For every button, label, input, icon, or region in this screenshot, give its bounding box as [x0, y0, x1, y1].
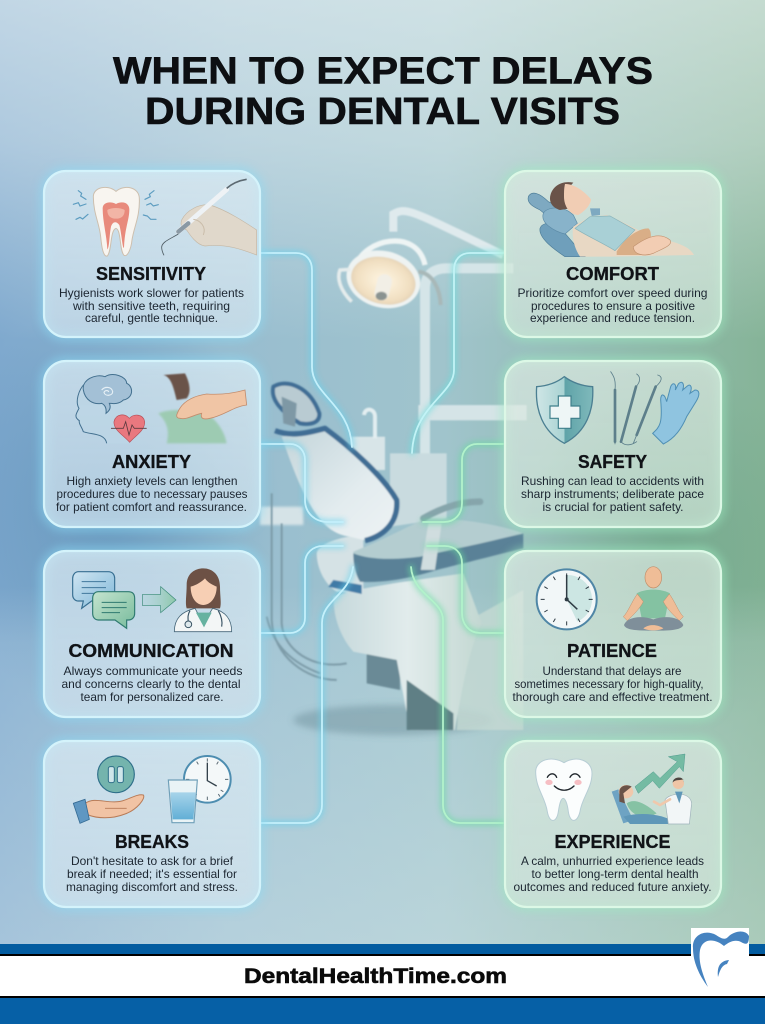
- central scene: dental chair and lamp: [260, 211, 527, 735]
- text: sensitivity: careful, gentle technique.: [85, 311, 218, 325]
- panel: patience: [505, 551, 721, 717]
- text: breaks: Don't hesitate to ask for a brief: [71, 854, 234, 868]
- text: anxiety: High anxiety levels can lengthen: [66, 474, 238, 488]
- text: patience: thorough care and effective treatment.: [512, 690, 712, 704]
- panel: safety: [505, 361, 721, 527]
- footer band: [0, 944, 765, 1024]
- connector lines: [260, 253, 503, 823]
- panel: communication: [44, 551, 260, 717]
- text: comfort: experience and reduce tension.: [530, 311, 695, 325]
- card glows: [44, 171, 721, 907]
- text: patience: Understand that delays are: [542, 664, 682, 678]
- text: safety: Rushing can lead to accidents with: [521, 474, 704, 488]
- text: sensitivity: [59, 286, 244, 325]
- heading: patience: PATIENCE: [567, 641, 657, 661]
- panel: anxiety: [44, 361, 260, 527]
- logo: tooth: [691, 928, 749, 987]
- title: DURING DENTAL VISITS: [145, 91, 620, 133]
- panel: experience: [505, 741, 721, 907]
- text: experience: [514, 854, 712, 894]
- text: breaks: break if needed; it's essential for: [67, 867, 237, 881]
- text: breaks: [66, 854, 238, 894]
- panel: sensitivity: [44, 171, 260, 337]
- icon: speech bubbles, arrow and dentist: [73, 568, 232, 632]
- text: experience: A calm, unhurried experience leads: [521, 854, 704, 868]
- text: communication: [62, 664, 243, 704]
- text: experience: outcomes and reduced future anxiety.: [514, 880, 712, 894]
- text: comfort: procedures to ensure a positive: [531, 299, 695, 313]
- title: WHEN TO EXPECT DELAYS: [113, 50, 653, 92]
- text: communication: Always communicate your needs: [64, 664, 243, 678]
- website address: DentalHealthTime.com: [244, 965, 507, 988]
- heading: experience: EXPERIENCE: [554, 832, 670, 852]
- icon: sensitive tooth: [73, 179, 257, 256]
- text: sensitivity: with sensitive teeth, requiring: [72, 299, 230, 313]
- text: safety: sharp instruments; deliberate pace: [521, 487, 704, 501]
- text: communication: team for personalized care.: [80, 690, 224, 704]
- heading: breaks: BREAKS: [115, 832, 189, 852]
- icon: shield, instruments and glove: [536, 372, 699, 445]
- heading: safety: SAFETY: [578, 452, 647, 472]
- panel: breaks: [44, 741, 260, 907]
- title: [113, 50, 653, 133]
- heading: anxiety: ANXIETY: [112, 452, 191, 472]
- icon: anxious head and reassuring hand: [76, 373, 247, 443]
- text: sensitivity: Hygienists work slower for patients: [59, 286, 244, 300]
- panel: comfort: [505, 171, 721, 337]
- icon: smiling tooth, patient, dentist and rising arrow: [536, 754, 692, 824]
- text: comfort: [518, 286, 708, 325]
- heading: sensitivity: SENSITIVITY: [96, 264, 206, 284]
- text: anxiety: for patient comfort and reassurance.: [56, 500, 247, 514]
- text: comfort: Prioritize comfort over speed during: [518, 286, 708, 300]
- text: breaks: managing discomfort and stress.: [66, 880, 238, 894]
- icon: relaxed patient in chair: [528, 182, 694, 257]
- text: safety: is crucial for patient safety.: [542, 500, 684, 514]
- text: communication: and concerns clearly to the dental: [62, 677, 240, 691]
- icon: clock and meditating person: [537, 567, 683, 631]
- heading: communication: COMMUNICATION: [68, 641, 234, 661]
- heading: comfort: COMFORT: [566, 264, 659, 284]
- text: safety: [521, 474, 704, 514]
- text: patience: [512, 664, 712, 704]
- text: anxiety: procedures due to necessary pauses: [56, 487, 248, 501]
- text: anxiety: [56, 474, 248, 514]
- text: patience: sometimes necessary for high-quality,: [514, 677, 704, 691]
- icon: pause button, hand, water and clock: [73, 756, 231, 823]
- text: experience: to better long-term dental health: [532, 867, 698, 881]
